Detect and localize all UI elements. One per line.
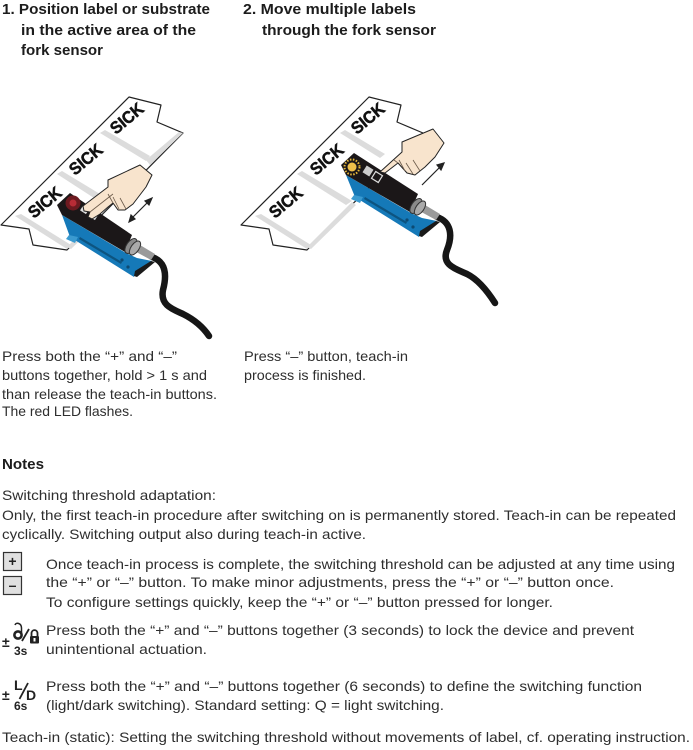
- heading: step 1: fork sensor: [21, 42, 103, 59]
- sensor body: [341, 153, 440, 237]
- illustration: step 1 fork sensor with labels: [1, 97, 209, 336]
- text: switching threshold adaptation: cyclically. Switching output also during teach-in active.: [2, 526, 366, 542]
- label strip: SICK: [306, 140, 348, 179]
- text: step 2 instruction: [244, 348, 408, 383]
- yellow LED: [344, 160, 360, 174]
- red LED: [66, 196, 80, 210]
- label strip: SICK: [106, 99, 148, 138]
- illustration: step 2 fork sensor with labels: [241, 97, 495, 303]
- text: light/dark instruction: [46, 678, 642, 713]
- text: step 1 instruction: The red LED flashes.: [2, 403, 133, 419]
- icon: light/dark 6s: [2, 677, 36, 713]
- label strip: SICK: [265, 183, 307, 222]
- text: static teach-in footnote: Teach-in (static): Setting the switching threshold without movements of label, cf. operating instruction.: [2, 729, 690, 745]
- icon: lock 3s: [2, 623, 39, 658]
- text: step 1 instruction: [2, 348, 217, 419]
- text: step 1 instruction: Press both the “+” and “–”: [2, 348, 177, 364]
- double arrow: [129, 198, 152, 222]
- text: step 1 instruction: than release the teach-in buttons.: [2, 386, 217, 402]
- label strip: SICK: [65, 140, 107, 179]
- heading: notes: Notes: [2, 456, 44, 473]
- hand pressing button: [380, 129, 444, 175]
- text: threshold adjustment: [46, 556, 675, 610]
- heading: step 2: through the fork sensor: [262, 22, 436, 39]
- icon: lock 3s: ±: [2, 634, 10, 650]
- sensor body: [57, 193, 155, 277]
- text: threshold adjustment: Once teach-in process is complete, the switching threshold can be adjusted at any time using: [46, 556, 675, 572]
- text: threshold adjustment: To configure settings quickly, keep the “+” or “–” button pressed for longer.: [46, 594, 553, 610]
- text: switching threshold adaptation: Only, the first teach-in procedure after switching on is permanently stored. Teach-in can be repeated: [2, 507, 676, 523]
- label strip: [1, 97, 183, 250]
- text: step 1 instruction: buttons together, hold > 1 s and: [2, 367, 207, 383]
- hand pressing buttons: [83, 165, 152, 219]
- text: lock instruction: Press both the “+” and “–” buttons together (3 seconds) to lock the device and prevent: [46, 622, 634, 638]
- text: threshold adjustment: the “+” or “–” button. To make minor adjustments, press the “+” or “–” button once.: [46, 574, 614, 590]
- connector: [407, 196, 440, 220]
- text: lock instruction: [46, 622, 634, 657]
- text: light/dark instruction: (light/dark switching). Standard setting: Q = light switching.: [46, 697, 444, 713]
- connector: [122, 236, 155, 260]
- heading: step 1: in the active area of the: [21, 22, 196, 39]
- text: switching threshold adaptation: [2, 487, 676, 542]
- teach-in buttons: [362, 165, 383, 183]
- icon: plus button: [4, 552, 22, 570]
- text: step 2 instruction: Press “–” button, teach-in: [244, 348, 408, 364]
- heading: step 2: 2. Move multiple labels: [243, 1, 416, 18]
- cable: [152, 257, 209, 336]
- heading: step 1: 1. Position label or substrate: [2, 1, 210, 18]
- label strip: [241, 97, 423, 250]
- icon: light/dark 6s: 6s: [14, 699, 28, 713]
- cable: [437, 217, 495, 303]
- icon: light/dark 6s: ±: [2, 687, 10, 703]
- label strip: SICK: [24, 183, 66, 222]
- label strip: SICK: [347, 99, 389, 138]
- icon: light/dark 6s: L: [14, 677, 23, 693]
- direction arrow: [422, 163, 444, 185]
- text: switching threshold adaptation: Switching threshold adaptation:: [2, 487, 216, 503]
- heading: step 1: [2, 1, 210, 59]
- text: step 2 instruction: process is finished.: [244, 367, 366, 383]
- text: lock instruction: unintentional actuation.: [46, 641, 207, 657]
- icon: light/dark 6s: D: [26, 687, 36, 703]
- icon: minus button: –: [9, 577, 17, 593]
- icon: plus button: +: [8, 553, 17, 569]
- icon: lock 3s: 3s: [14, 644, 28, 658]
- heading: step 2: [243, 1, 436, 39]
- teach-in buttons: [80, 205, 98, 220]
- text: light/dark instruction: Press both the “+” and “–” buttons together (6 seconds) to define the switching function: [46, 678, 642, 694]
- icon: minus button: [4, 576, 22, 594]
